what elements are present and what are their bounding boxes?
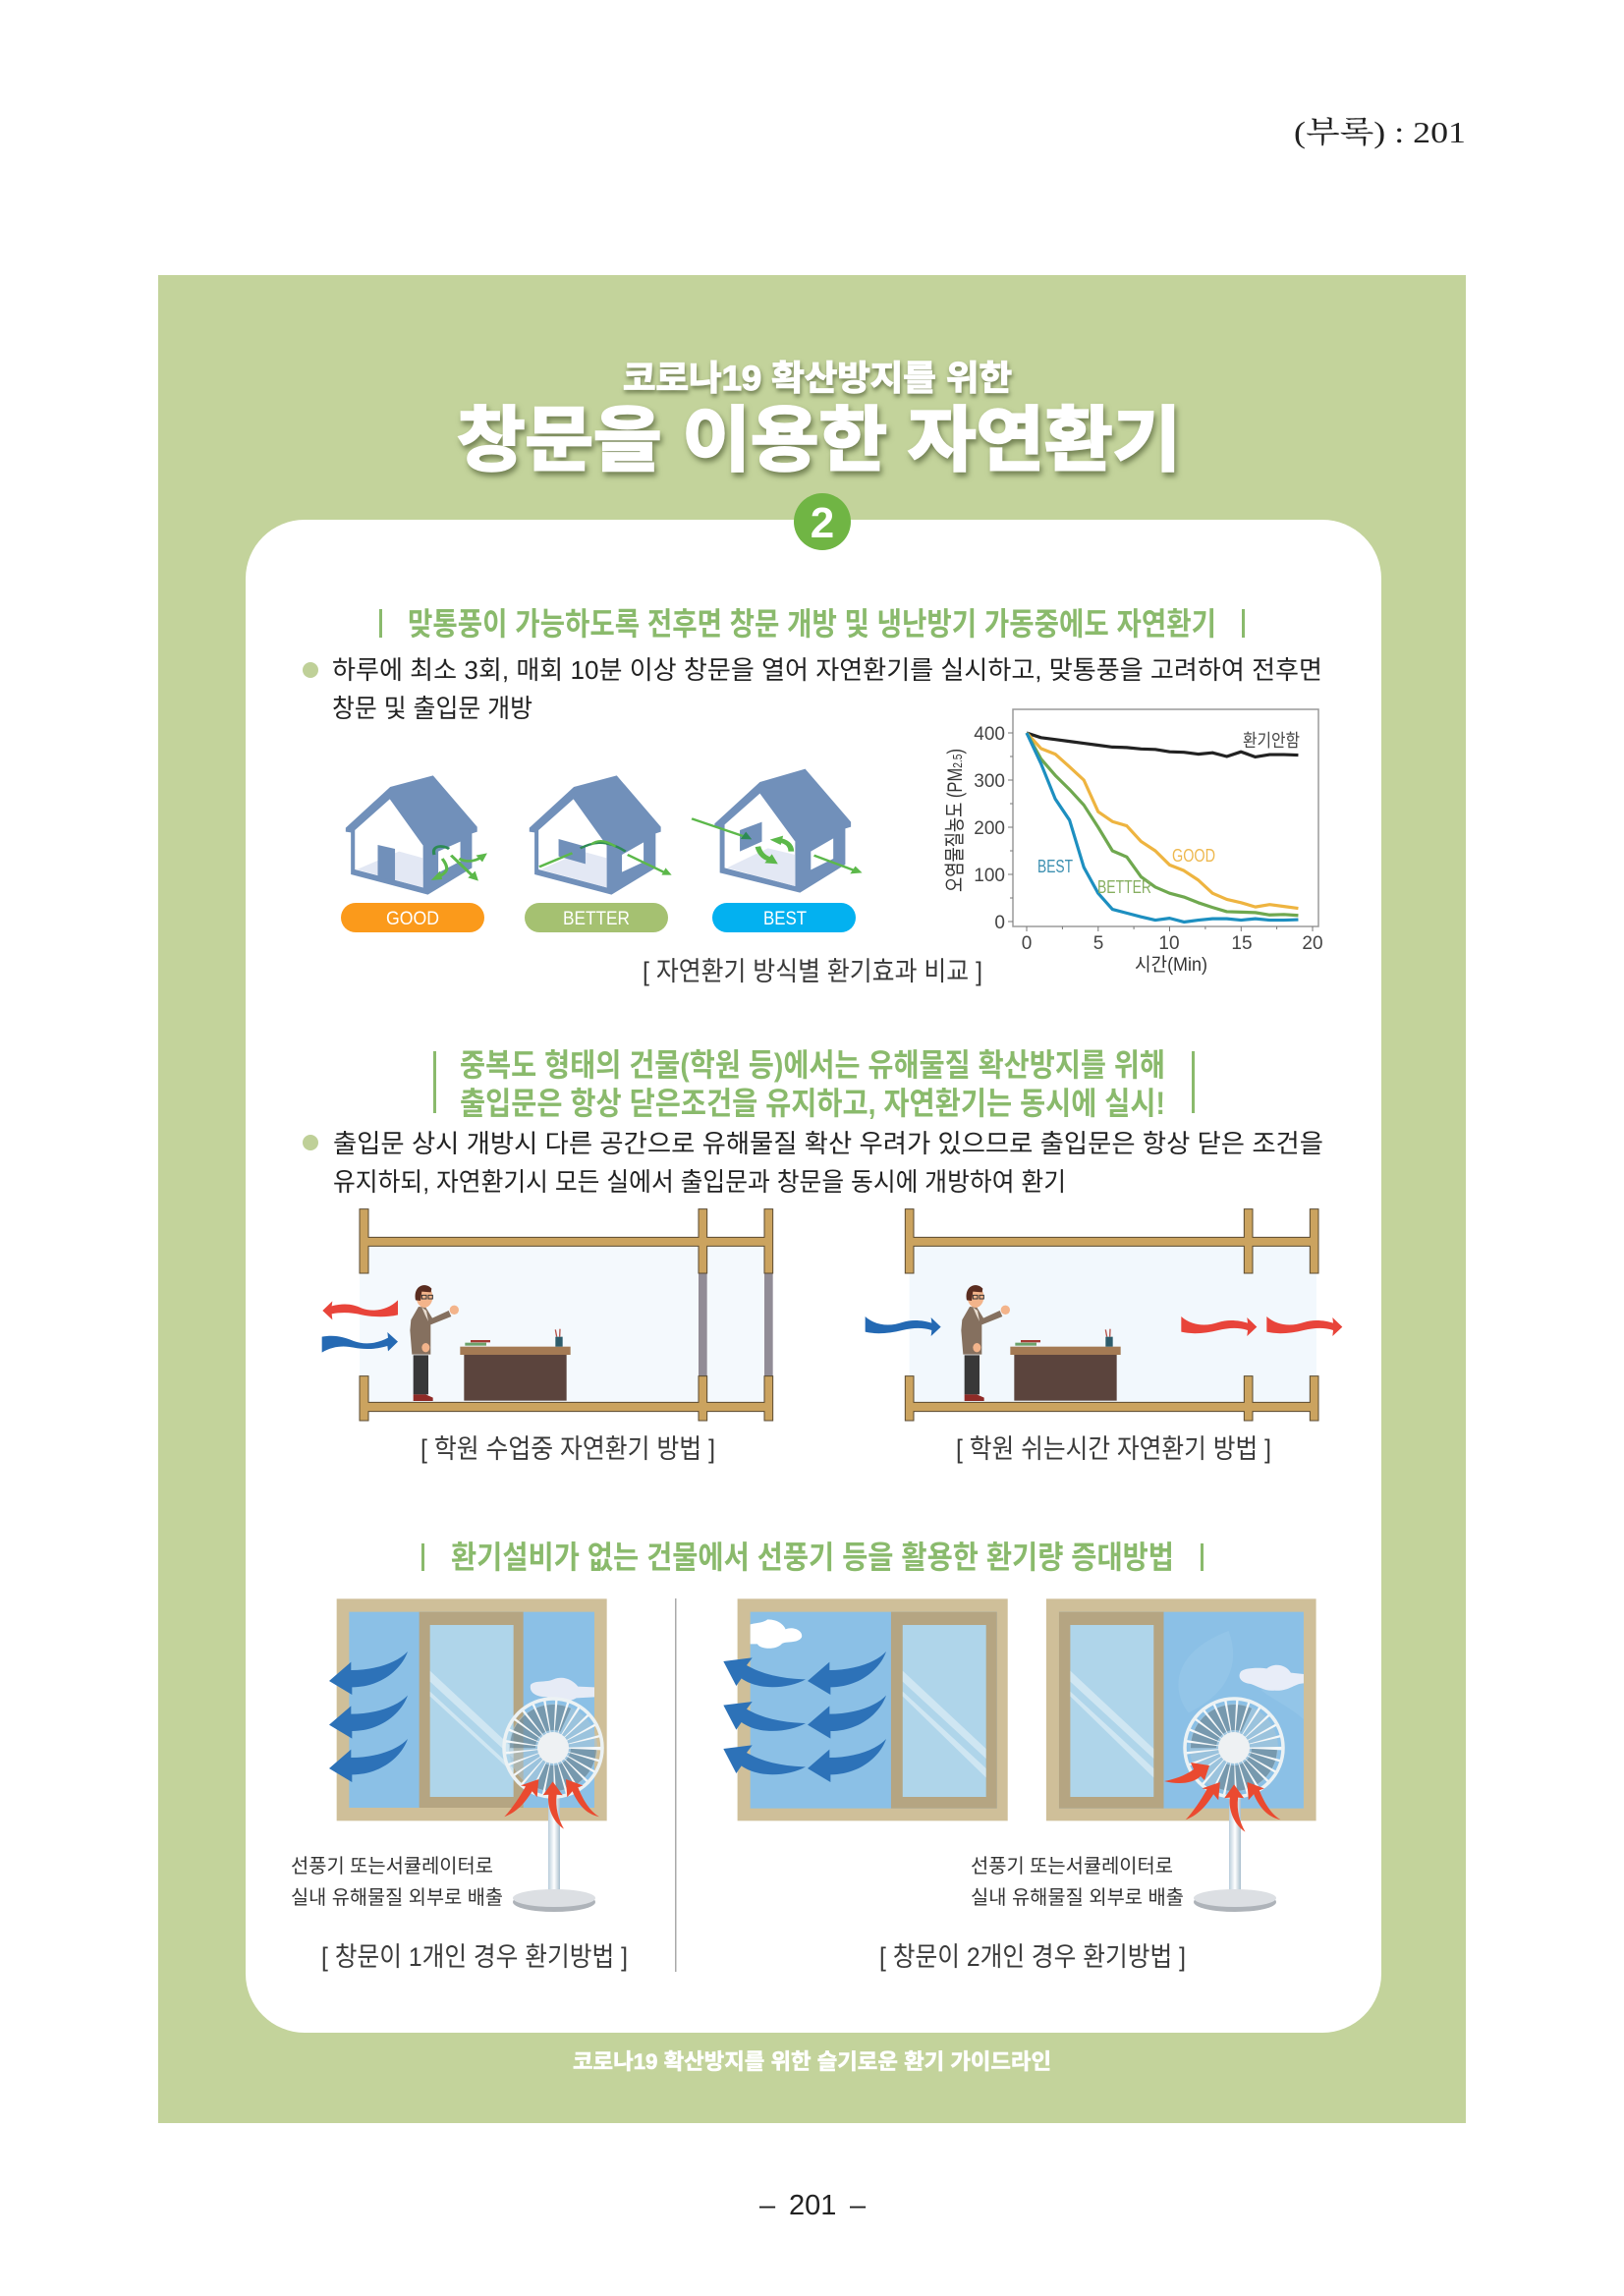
line chart: pollutant concentration over time: 15	[1231, 933, 1253, 954]
badge: number 2: 2	[811, 499, 834, 547]
footer: guideline title: 코로나19 확산방지를 위한 슬기로운 환기 가이드라인	[573, 2049, 1051, 2074]
arrow: air out through door	[1181, 1316, 1257, 1336]
arrow: air in	[866, 1316, 941, 1336]
line chart: pollutant concentration over time: 5	[1093, 933, 1103, 954]
line chart: pollutant concentration over time: 시간(Min)	[1135, 954, 1207, 976]
heading: section 3: 환기설비가 없는 건물에서 선풍기 등을 활용한 환기량 증대방법	[451, 1540, 1174, 1575]
text block: section 1 description	[303, 655, 1322, 723]
label: BEST pill: BEST	[763, 909, 807, 929]
text block: section 2 description: 유지하되, 자연환기시 모든 실에서 출입문과 창문을 동시에 개방하여 환기	[333, 1167, 1066, 1197]
icon: fan	[1185, 1699, 1283, 1912]
page footer: page number: –	[850, 2190, 867, 2221]
text block: fan note, right	[971, 1855, 1184, 1909]
line chart: pollutant concentration over time: GOOD	[1172, 846, 1215, 866]
arrows: intake air	[1164, 1763, 1280, 1832]
chart lines	[1027, 733, 1298, 922]
text block: fan note, right: 선풍기 또는서큘레이터로	[971, 1855, 1173, 1877]
line chart: pollutant concentration over time: 400	[974, 724, 1005, 745]
title: main heading: 창문을 이용한 자연환기	[457, 402, 1181, 480]
caption: one window: [ 창문이 1개인 경우 환기방법 ]	[321, 1942, 628, 1972]
text block: fan note, left: 실내 유해물질 외부로 배출	[291, 1886, 503, 1909]
arrow: air in	[322, 1332, 398, 1353]
icon: GOOD house	[346, 775, 487, 895]
illustration: one window with fan	[329, 1598, 607, 1912]
caption: ventilation comparison: [ 자연환기 방식별 환기효과 비교 ]	[643, 957, 982, 986]
illustration: two windows, left window	[723, 1598, 1008, 1820]
illustration: two windows, right window with fan	[1046, 1598, 1316, 1912]
line chart: pollutant concentration over time: 20	[1302, 933, 1323, 954]
line chart: pollutant concentration over time: 10	[1158, 933, 1180, 954]
title: subtitle line: 코로나19 확산방지를 위한	[623, 360, 1012, 398]
heading: section 2	[433, 1047, 1195, 1121]
badge: number 2	[794, 493, 851, 550]
heading: section 2: 출입문은 항상 닫은조건을 유지하고, 자연환기는 동시에 실시!	[460, 1086, 1165, 1121]
icon: BETTER house	[530, 775, 672, 895]
icon: BEST house	[692, 769, 863, 893]
caption: during break: [ 학원 쉬는시간 자연환기 방법 ]	[956, 1434, 1271, 1464]
text block: section 1 description: 하루에 최소 3회, 매회 10분 이상 창문을 열어 자연환기를 실시하고, 맞통풍을 고려하여 전후면	[332, 655, 1322, 685]
line chart: pollutant concentration over time: BEST	[1037, 857, 1073, 876]
text block: section 1 description: 창문 및 출입문 개방	[332, 694, 532, 723]
text block: section 2 description: 출입문 상시 개방시 다른 공간으로 유해물질 확산 우려가 있으므로 출입문은 항상 닫은 조건을	[333, 1129, 1323, 1158]
page footer: page number: 201	[789, 2190, 836, 2221]
illustration: house comparison	[346, 769, 863, 895]
text block: fan note, left: 선풍기 또는서큘레이터로	[291, 1855, 493, 1877]
page footer: page number: –	[759, 2190, 776, 2221]
arrow: air out through window	[1266, 1316, 1342, 1336]
line chart: pollutant concentration over time: 0	[1022, 933, 1032, 954]
label: GOOD pill: GOOD	[386, 909, 439, 929]
line chart: pollutant concentration over time: 300	[974, 771, 1005, 792]
panel: green poster background	[158, 275, 1466, 2123]
text block: fan note, right: 실내 유해물질 외부로 배출	[971, 1886, 1184, 1909]
arrow: air out	[322, 1300, 398, 1319]
line chart: pollutant concentration over time: 환기안함	[1243, 731, 1300, 751]
text block: section 2 description	[303, 1129, 1323, 1197]
line chart: pollutant concentration over time: 200	[974, 818, 1005, 839]
caption: during class: [ 학원 수업중 자연환기 방법 ]	[420, 1434, 715, 1464]
panel: white content card	[246, 520, 1381, 2033]
icon: fan	[504, 1699, 602, 1912]
text block: fan note, left	[291, 1855, 503, 1909]
illustration: classroom during class	[322, 1209, 773, 1421]
line chart: pollutant concentration over time: 0	[994, 913, 1005, 933]
label: BETTER pill: BETTER	[563, 909, 630, 929]
heading: section 1: 맞통풍이 가능하도록 전후면 창문 개방 및 냉난방기 가동중에도 자연환기	[408, 606, 1216, 642]
line chart: pollutant concentration over time: 오염물질농도 (PM2.5)	[944, 749, 967, 892]
arrows: intake air	[504, 1779, 599, 1829]
heading: section 2: 중복도 형태의 건물(학원 등)에서는 유해물질 확산방지를 위해	[460, 1047, 1165, 1083]
page header: appendix number: (부록) : 201	[1294, 115, 1466, 149]
line chart: pollutant concentration over time: 100	[974, 866, 1005, 886]
label: BEST pill	[712, 903, 856, 932]
line chart: pollutant concentration over time: BETTER	[1097, 877, 1151, 897]
caption: two windows: [ 창문이 2개인 경우 환기방법 ]	[879, 1942, 1186, 1972]
line chart: pollutant concentration over time	[944, 709, 1323, 976]
label: BETTER pill	[525, 903, 668, 932]
label: GOOD pill	[341, 903, 484, 932]
illustration: classroom during break	[866, 1209, 1342, 1421]
